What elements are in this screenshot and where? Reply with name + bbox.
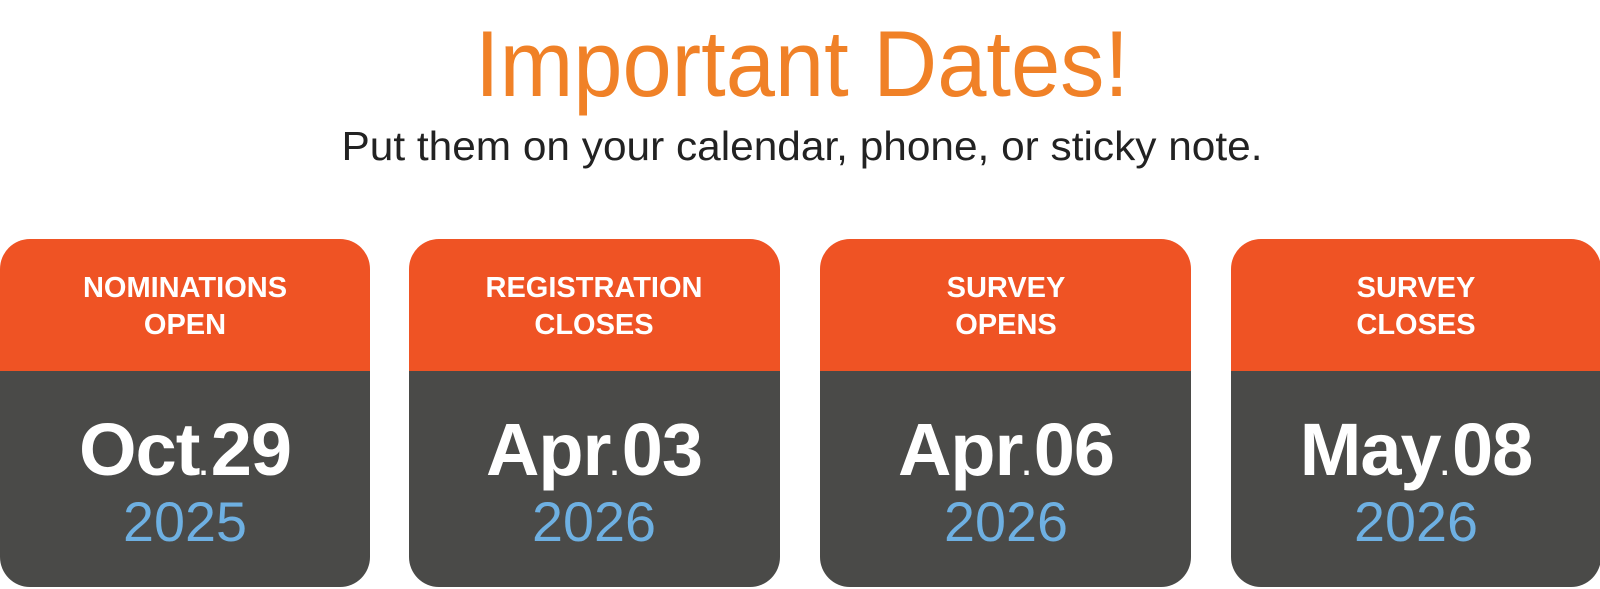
card header: REGISTRATION <box>486 272 702 304</box>
card body: 2026 <box>1354 490 1478 553</box>
card body: May.08 <box>1300 408 1532 491</box>
card body: 2025 <box>123 490 247 553</box>
card: registration closes <box>409 239 780 587</box>
card header: CLOSES <box>534 309 654 341</box>
card header: OPEN <box>144 309 226 341</box>
card header <box>409 239 780 371</box>
card header: OPENS <box>955 309 1057 341</box>
card header: CLOSES <box>1356 309 1476 341</box>
card body <box>409 371 780 587</box>
card body: Oct.29 <box>79 408 291 491</box>
subtitle: Put them on your calendar, phone, or sticky note. <box>342 123 1262 169</box>
card header <box>820 239 1191 371</box>
title: Important Dates! <box>475 11 1129 116</box>
card header: SURVEY <box>947 272 1065 304</box>
card: nominations open <box>0 239 370 587</box>
card header <box>1231 239 1600 371</box>
card header: NOMINATIONS <box>83 272 287 304</box>
card: survey opens <box>820 239 1191 587</box>
card body: 2026 <box>532 490 656 553</box>
card body <box>820 371 1191 587</box>
card body: Apr.03 <box>486 408 702 491</box>
card body <box>1231 371 1600 587</box>
card header <box>0 239 370 371</box>
card body: 2026 <box>944 490 1068 553</box>
card body <box>0 371 370 587</box>
card: survey closes <box>1231 239 1600 587</box>
card body: Apr.06 <box>898 408 1114 491</box>
card header: SURVEY <box>1357 272 1475 304</box>
